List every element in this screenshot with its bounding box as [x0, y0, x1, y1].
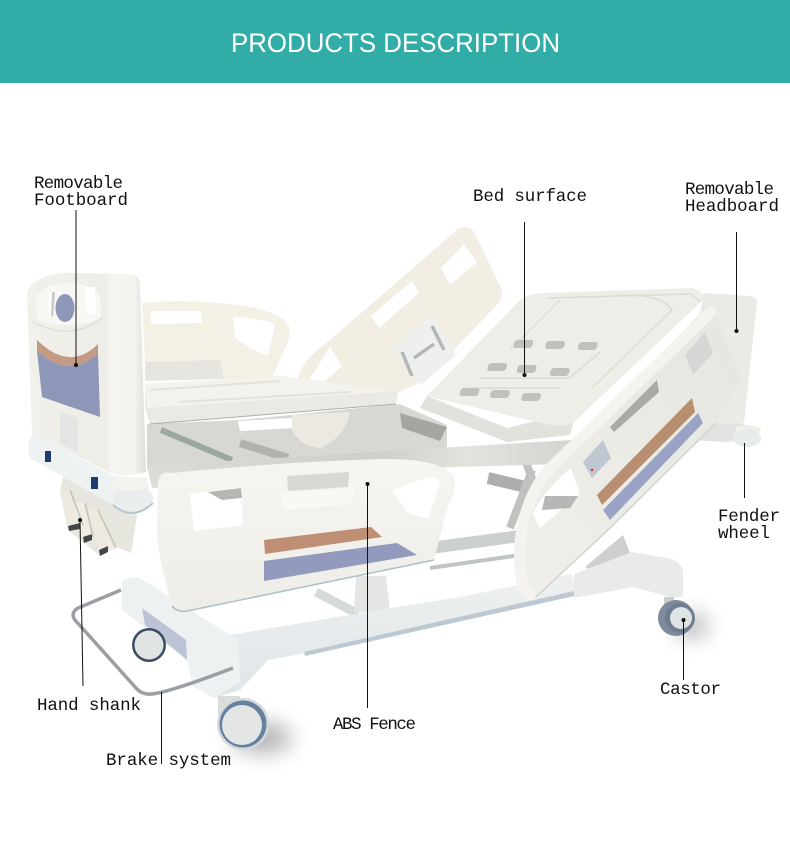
fence left window — [190, 487, 243, 531]
label: removable headboard: Headboard — [685, 197, 779, 217]
label: ABS fence — [333, 482, 416, 735]
label: brake system: Brake system — [106, 751, 231, 771]
header title: PRODUCTS DESCRIPTION — [231, 28, 560, 58]
label: castor — [660, 618, 721, 700]
cross beam — [147, 440, 572, 488]
hand shank pedals — [60, 477, 137, 556]
footboard emblem — [56, 294, 74, 322]
label: hand shank: Hand shank — [37, 696, 141, 716]
header banner — [0, 0, 790, 83]
footboard purple panel — [37, 351, 100, 417]
head rail window — [685, 332, 713, 375]
base end, head side — [574, 552, 683, 598]
bed deck, foot section — [145, 376, 398, 424]
footboard — [27, 273, 146, 476]
fence embossed recess — [280, 488, 355, 510]
label: fender wheel — [718, 443, 780, 544]
far side rail, head end — [297, 227, 502, 392]
see-through gap — [533, 468, 580, 528]
footboard brown band — [37, 340, 98, 366]
label: removable headboard: Removable — [685, 180, 774, 200]
bed deck, head section — [420, 288, 703, 442]
head rail slot — [610, 380, 659, 432]
base frame — [122, 552, 683, 698]
label: removable footboard: Removable — [34, 174, 123, 194]
label: removable footboard — [34, 174, 128, 367]
base side bar — [188, 574, 576, 698]
deck ventilation holes — [459, 340, 598, 401]
rail clamp — [393, 316, 456, 385]
lower rods — [430, 536, 520, 548]
near side rail, foot end (ABS fence) — [157, 459, 455, 611]
footboard handle contour — [36, 283, 101, 326]
label: hand shank — [37, 518, 141, 716]
hospital bed illustration — [27, 227, 761, 753]
headboard — [690, 293, 757, 442]
label: bed surface — [473, 187, 587, 377]
label: fender wheel: Fender — [718, 507, 780, 527]
wheel: foot back — [132, 628, 166, 662]
wheels — [132, 597, 695, 750]
lift tube — [488, 478, 572, 498]
fence right window — [392, 478, 440, 519]
footboard handle windows — [49, 292, 55, 317]
label: removable footboard: Footboard — [34, 191, 128, 211]
fence purple stripe — [264, 543, 417, 581]
wheel: head front — [658, 597, 695, 636]
floor shadows — [232, 614, 708, 753]
footboard bumper strip — [28, 433, 153, 516]
base end, foot side — [122, 578, 240, 698]
wheel: foot front — [217, 696, 269, 750]
label: ABS fence: ABS Fence — [333, 715, 416, 735]
label: castor: Castor — [660, 680, 721, 700]
near side rail, head end — [520, 307, 741, 599]
gauge dial — [583, 440, 611, 478]
label: bed surface: Bed surface — [473, 187, 587, 207]
head rail purple stripe — [603, 413, 703, 520]
fence brown stripe — [264, 527, 382, 554]
under-deck mechanism — [147, 404, 630, 614]
label: fender wheel: wheel — [718, 524, 770, 544]
head rail brown stripe — [597, 398, 695, 505]
silver handle bar — [73, 590, 233, 694]
label: brake system — [106, 692, 231, 771]
label: removable headboard — [685, 180, 779, 333]
far side rail, foot end — [142, 301, 289, 381]
dark hinge wedge — [400, 413, 447, 441]
fence centre slot — [287, 472, 349, 491]
fender wheel — [733, 425, 761, 447]
